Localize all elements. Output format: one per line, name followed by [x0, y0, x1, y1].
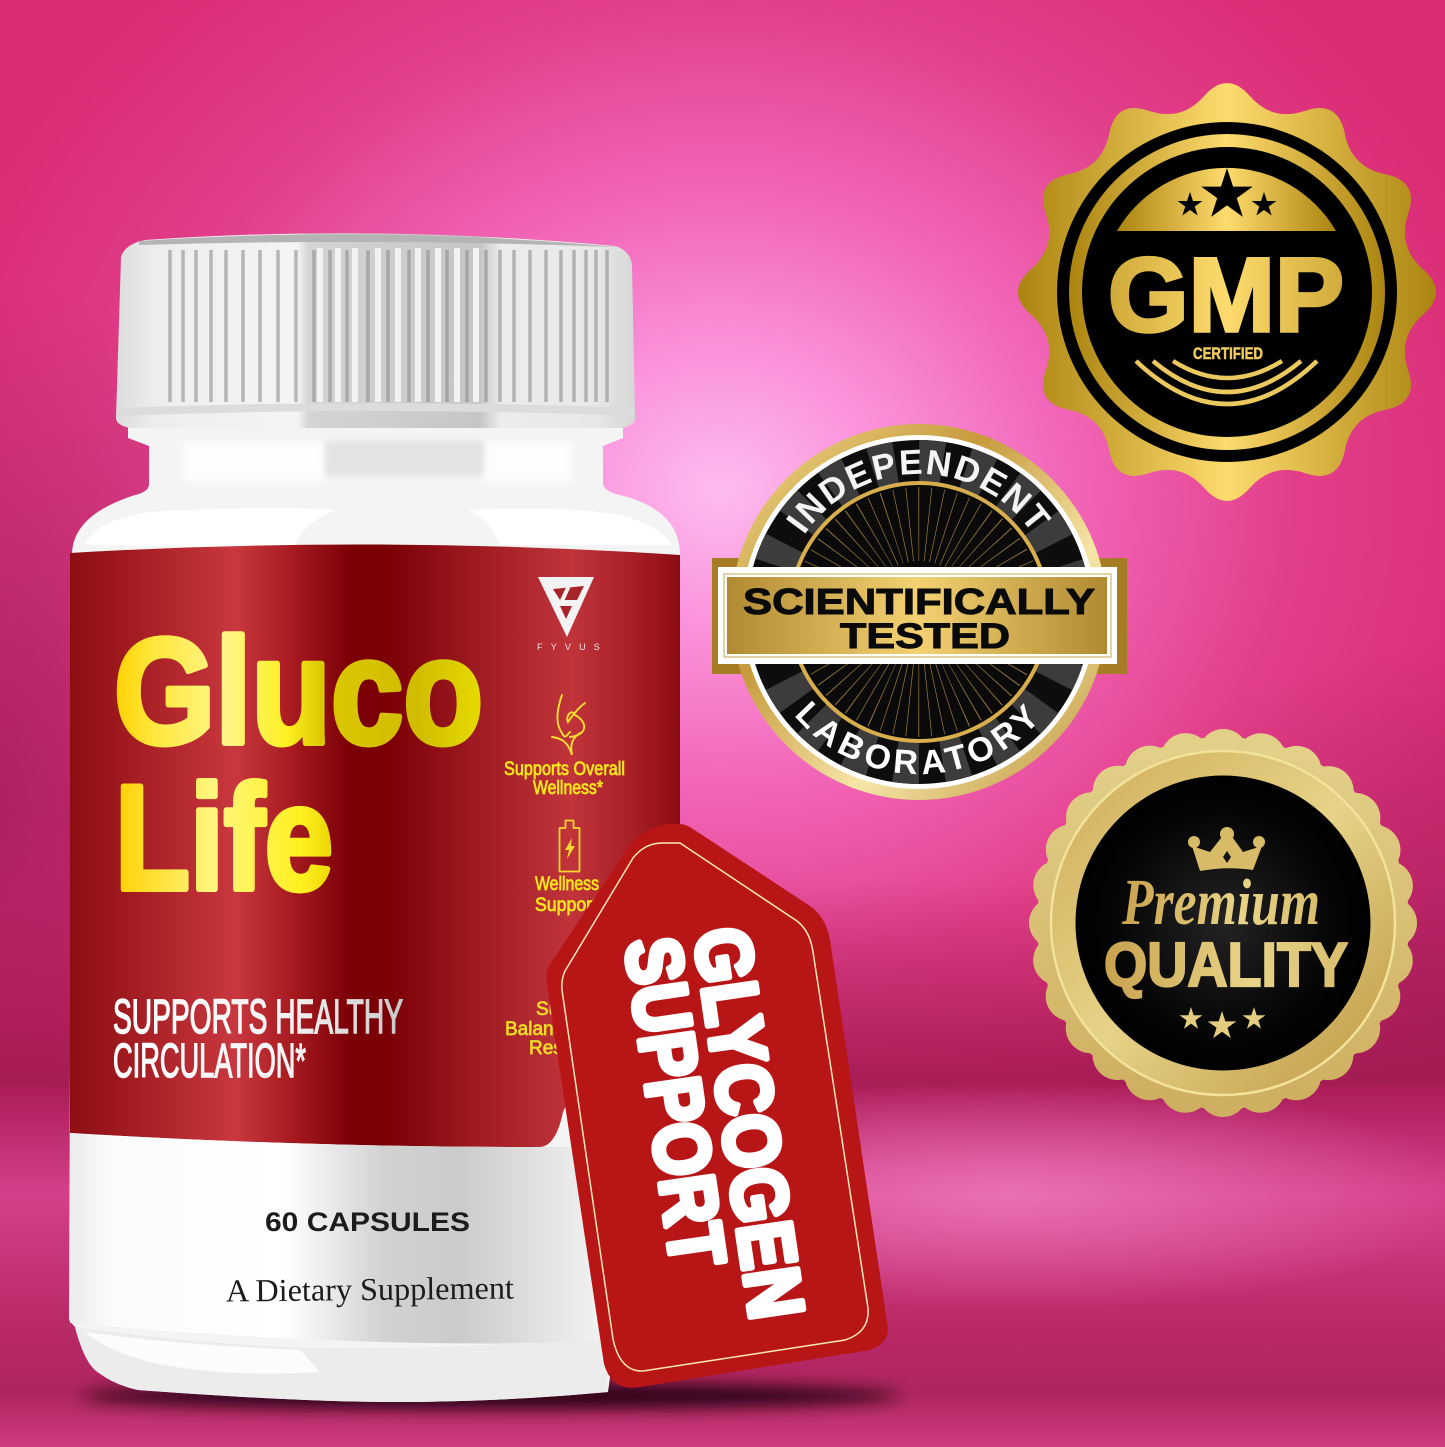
banner back tabs	[712, 558, 1127, 674]
claim line 2: CIRCULATION*	[113, 1035, 306, 1088]
benefit: wellness support: Support	[535, 895, 598, 916]
bottle body	[69, 426, 680, 1402]
bottle cap	[116, 233, 635, 428]
smile arcs	[1136, 361, 1317, 404]
arc text: laboratory: LABORATORY	[795, 700, 1035, 774]
brand title: Gluco: Gluco	[114, 607, 483, 775]
quality wordmark: QUALITY	[1104, 931, 1348, 1000]
bottle shoulder highlights	[85, 440, 672, 548]
ribbon banner: SCIENTIFICALLY	[743, 581, 1095, 622]
bottle base	[75, 1327, 608, 1402]
benefit: balanced response: Res	[529, 1038, 563, 1059]
benefit: balanced response: Su	[536, 999, 559, 1020]
icon: dancer wellness	[552, 695, 585, 755]
benefit: wellness support: Wellness	[535, 874, 599, 895]
brand logo: FYVUS	[537, 642, 608, 652]
icon: battery	[560, 820, 580, 872]
brand title: Life: Life	[115, 754, 333, 921]
benefit: overall wellness: Supports Overall	[504, 759, 625, 780]
GMP wordmark: GMP	[1108, 237, 1344, 354]
product bottle	[69, 233, 680, 1402]
benefit: wellness support	[535, 874, 599, 916]
premium quality badge	[1037, 737, 1409, 1109]
scientifically tested badge	[712, 424, 1127, 800]
ribbon banner	[718, 567, 1117, 664]
glycogen support tag	[546, 824, 888, 1388]
tag text: glycogen: GLYCOGEN	[677, 922, 821, 1324]
dietary supplement note: A Dietary Supplement	[226, 1269, 514, 1309]
ribbon banner: TESTED	[840, 617, 1010, 656]
red label	[70, 544, 680, 1147]
tag text: support: SUPPORT	[608, 932, 742, 1272]
white lower band	[70, 1133, 618, 1344]
certified label: CERTIFIED	[1193, 345, 1263, 363]
brand logo	[537, 577, 608, 652]
three stars	[1180, 1007, 1265, 1038]
premium script: Premium	[1121, 866, 1320, 939]
scalloped seal	[1037, 737, 1409, 1109]
GMP certified badge	[1018, 83, 1436, 501]
base highlight	[85, 1332, 320, 1374]
scalloped gold seal	[1018, 83, 1436, 501]
capsule count: 60 CAPSULES	[265, 1207, 470, 1237]
icon: crown	[1188, 827, 1265, 871]
tag stitched border	[562, 843, 868, 1371]
benefit: overall wellness	[504, 759, 625, 799]
benefit: balanced response	[505, 999, 563, 1059]
benefit: overall wellness: Wellness*	[533, 778, 603, 799]
ring segments	[769, 462, 1069, 762]
benefit: balanced response: Balan	[505, 1019, 554, 1040]
dome with stars	[1117, 168, 1336, 231]
tag shape	[546, 824, 888, 1388]
sunburst rays	[831, 524, 1007, 700]
arc text: independent: INDEPENDENT	[786, 450, 1052, 534]
claim line 1: SUPPORTS HEALTHY	[113, 991, 403, 1044]
